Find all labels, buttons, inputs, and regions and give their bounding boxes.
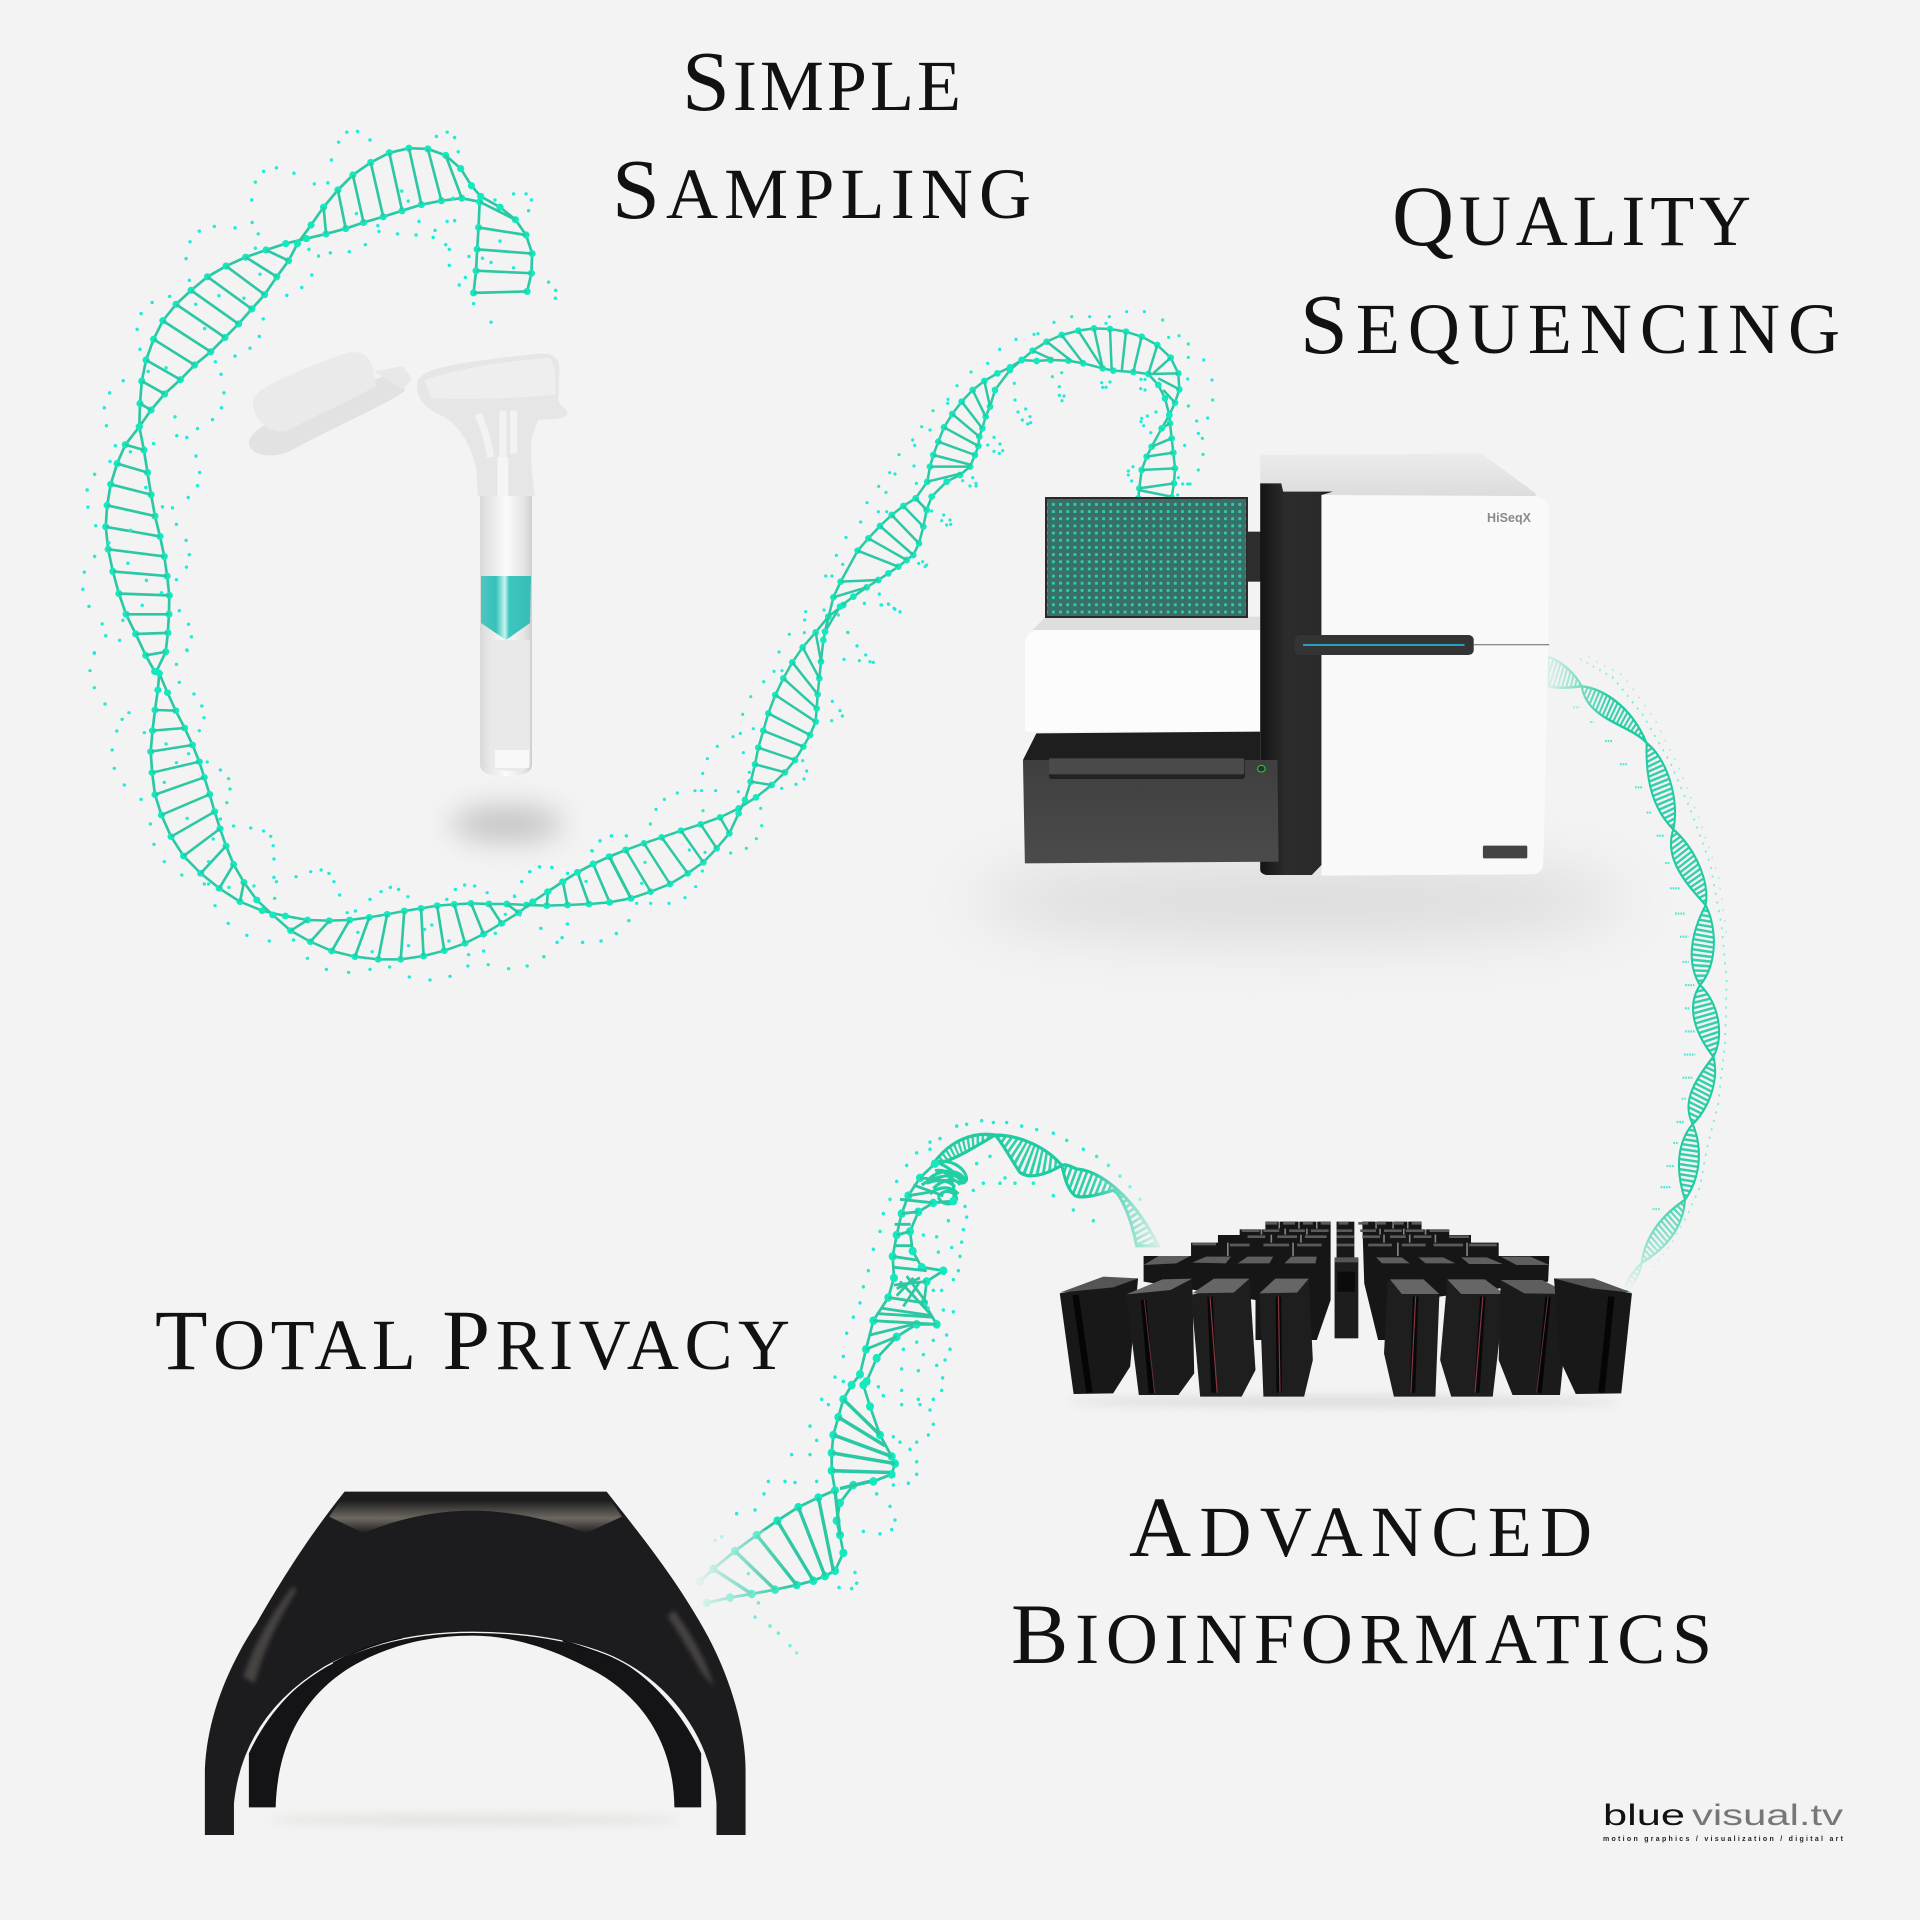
front rack 5 bbox=[1384, 1279, 1439, 1397]
front rack 2 bbox=[1126, 1279, 1194, 1395]
arch top highlight bbox=[329, 1500, 622, 1533]
logo: bluevisual.tv: visual.tv bbox=[1692, 1799, 1843, 1832]
arch side highlights bbox=[243, 1587, 297, 1683]
LED screen bbox=[1046, 498, 1247, 617]
tube shadow bbox=[451, 806, 563, 842]
drawer bbox=[1023, 732, 1279, 863]
handle bbox=[1295, 635, 1549, 655]
arch outer shell bbox=[205, 1492, 746, 1835]
left white box bbox=[1025, 617, 1260, 732]
dark connector bbox=[1245, 532, 1262, 582]
logo: bluevisual.tv: blue bbox=[1603, 1799, 1685, 1832]
front rack 3 bbox=[1191, 1279, 1255, 1397]
machine top face bbox=[1260, 453, 1536, 497]
racks shadow bbox=[1068, 1396, 1621, 1407]
heading: Advanced Bioinformatics bbox=[1011, 1479, 1712, 1682]
front rack 1 bbox=[1060, 1277, 1138, 1394]
heading: Simple Sampling bbox=[612, 33, 1031, 237]
DNA strand: sampling to sequencing bbox=[83, 131, 1213, 980]
DNA strand: sequencing to bioinformatics (thin helix) bbox=[1548, 657, 1727, 1292]
arch shadow bbox=[268, 1814, 681, 1826]
DNA segment: rising middle bbox=[514, 603, 900, 957]
label plate bbox=[1483, 846, 1527, 858]
heading: Advanced Bioinformatics: ADVANCED bbox=[1129, 1479, 1592, 1575]
DNA segment: bottom curve bbox=[90, 651, 631, 980]
center rack bbox=[1335, 1257, 1358, 1338]
heading: Simple Sampling: SIMPLE bbox=[682, 33, 961, 129]
front rack 8 bbox=[1554, 1278, 1632, 1394]
front rack 4 bbox=[1259, 1279, 1313, 1397]
tube insert bbox=[491, 640, 530, 771]
black column bbox=[1260, 483, 1333, 875]
privacy arch device bbox=[205, 1492, 746, 1835]
arch rim highlight bbox=[235, 1632, 716, 1835]
logo: bluevisual.tv bbox=[1603, 1799, 1844, 1843]
heading: Simple Sampling: SAMPLING bbox=[612, 141, 1031, 237]
machine floor shadow bbox=[970, 860, 1630, 940]
back rows bbox=[1144, 1221, 1549, 1340]
machine brand: HiSeqX bbox=[1487, 511, 1532, 525]
heading: Total Privacy: TOTAL PRIVACY bbox=[155, 1292, 790, 1388]
DNA segment: top loop bbox=[83, 131, 556, 671]
logo: bluevisual.tv: motion graphics / visualization / digital art bbox=[1603, 1836, 1844, 1843]
DNA segment: arc toward sequencer bbox=[825, 312, 1213, 646]
heading: Quality Sequencing: SEQUENCING bbox=[1300, 276, 1840, 372]
heading: Quality Sequencing: QUALITY bbox=[1392, 168, 1751, 264]
server racks bbox=[1060, 1221, 1632, 1407]
front rack 7 bbox=[1499, 1280, 1570, 1395]
tube caps and funnel bbox=[249, 352, 567, 496]
scatter dots bbox=[715, 1121, 1140, 1653]
sampling tube bbox=[249, 352, 567, 842]
heading: Quality Sequencing bbox=[1300, 168, 1840, 372]
DNA segment: upper fan bbox=[933, 1133, 1158, 1246]
arch inner ring bbox=[249, 1632, 701, 1807]
sequencing machine bbox=[970, 453, 1630, 940]
DNA segment: central twist bbox=[700, 1161, 967, 1603]
heading: Advanced Bioinformatics: BIOINFORMATICS bbox=[1011, 1586, 1712, 1682]
right white panel bbox=[1321, 495, 1549, 876]
DNA strand: bioinformatics to privacy bbox=[700, 1121, 1158, 1653]
tube liquid bbox=[481, 576, 531, 640]
front rack 6 bbox=[1440, 1279, 1505, 1397]
tube body bbox=[480, 496, 532, 776]
